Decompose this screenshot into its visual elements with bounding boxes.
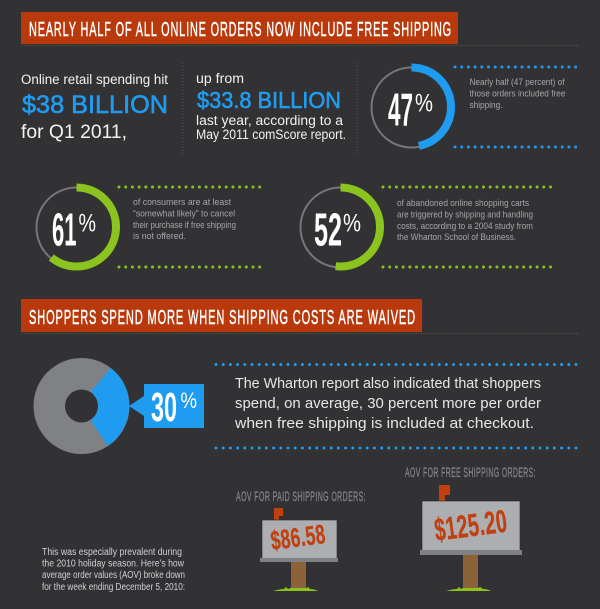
label: AOV paid shipping: AOV FOR PAID SHIPPING ORDERS: [236,489,366,504]
text block: 61 percent description: of consumers are at least [133,197,231,207]
donut gauge: 47 percent: % [415,90,433,118]
text block: Wharton report: The Wharton report also indicated that shoppers [235,375,541,392]
text block: 52 percent description: costs, according to a 2004 study from [397,221,533,231]
dotted rule: blue above Wharton text [216,363,579,366]
donut gauge: 52 percent [300,188,380,268]
text block: 61 percent description: is not offered. [133,231,186,241]
text block: $38 billion: Online retail spending hit [21,72,168,87]
text block: Wharton report [234,375,541,432]
icon: mailbox sign, paid shipping $86.58 [260,508,338,591]
text block: 52 percent description: of abandoned online shopping carts [397,198,529,208]
dotted rule: blue below Wharton text [216,446,579,450]
text block: 61 percent description [133,197,236,241]
text block: holiday season note: average order values (AOV) broke down [42,570,185,581]
text block: 52 percent description [397,198,533,242]
icon: mailbox sign, paid shipping $86.58: $86.58 [269,519,327,556]
text block: $33.8 billion: up from [196,71,244,86]
donut gauge: 61 percent [36,188,116,268]
heading: shoppers spend more [21,299,422,332]
donut gauge: 52 percent: % [343,210,361,238]
dotted rules: green, 61 percent [119,187,261,267]
text block: holiday season note: This was especially prevalent during [42,547,182,558]
text block: Wharton report: spend, on average, 30 percent more per order [235,395,541,412]
icon: mailbox sign, free shipping $125.20 [420,485,522,591]
text block: 47 percent description: those orders included free [470,88,566,98]
text block: 61 percent description: their purchase if free shipping [133,220,236,230]
text block: Wharton report: when free shipping is included at checkout. [234,415,534,432]
donut gauge: 61 percent: % [78,210,96,238]
text block: 47 percent description: Nearly half (47 percent) of [470,77,565,87]
dotted rule: blue top [455,66,579,68]
callout: 30 percent: 30 [151,384,177,430]
donut gauge: 47 percent [372,68,452,148]
text block: $38 billion [21,72,168,143]
text block: $33.8 billion: last year, according to a [196,113,343,128]
icon: mailbox sign, free shipping $125.20: $125.20 [432,503,509,548]
text block: holiday season note: for the week ending December 5, 2010: [42,582,185,593]
callout: 30 percent [129,384,204,430]
heading: nearly half of all online orders [21,12,458,44]
donut gauge: 52 percent: 52 [314,204,342,256]
donut gauge: 47 percent: 47 [388,84,413,136]
text block: $33.8 billion [196,71,346,142]
text block: $38 billion: $38 BILLION [22,91,168,119]
text block: holiday season note [42,547,185,593]
text block: $33.8 billion: May 2011 comScore report. [196,127,346,142]
text block: 52 percent description: the Wharton School of Business. [397,232,516,242]
text block: 47 percent description: shipping. [470,100,502,110]
dotted rule: blue bottom [455,146,579,148]
text block: holiday season note: the 2010 holiday season. Here’s how [42,558,185,570]
text block: 61 percent description: “somewhat likely” to cancel [133,208,235,218]
donut gauge: 61 percent: 61 [52,204,76,256]
donut chart: 30 percent slice [34,358,130,454]
text block: $33.8 billion: $33.8 BILLION [197,87,341,113]
text block: $38 billion: for Q1 2011, [21,122,127,143]
text block: 47 percent description [470,77,566,110]
dotted rules: green, 52 percent [383,187,555,267]
text block: 52 percent description: are triggered by shipping and handling [397,210,533,220]
callout: 30 percent: % [180,388,197,413]
